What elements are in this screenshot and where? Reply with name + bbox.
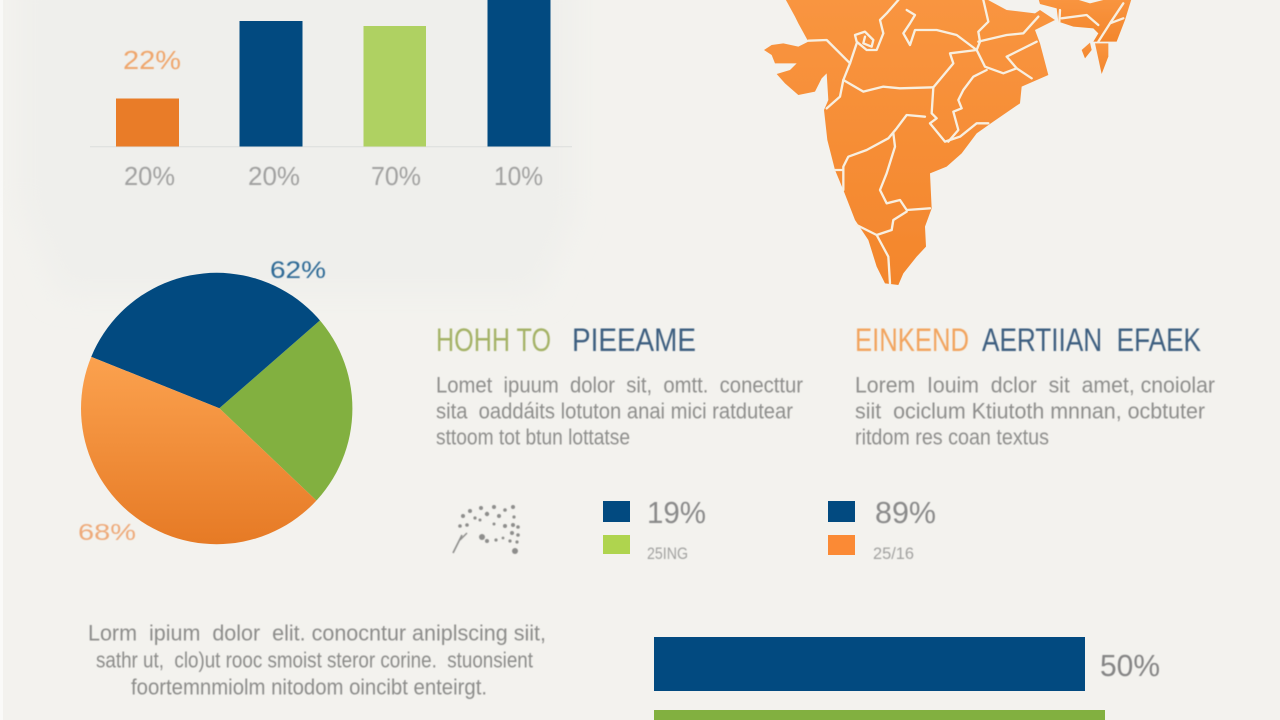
pie label: orange: 68% [78, 519, 136, 545]
body copy: left column: sita oaddáits lotuton anai mici ratdutear [436, 398, 793, 424]
pie label: blue: 62% [270, 257, 326, 284]
tall blue bar [488, 0, 550, 146]
icon: dotted cluster [453, 505, 520, 554]
pie slice: green [220, 320, 352, 500]
text block: left column [436, 322, 803, 450]
heading: right column: AERTIIAN EFAEK [982, 322, 1201, 358]
horizontal bar value: 50% [1100, 648, 1160, 683]
axis labels: 10% [494, 161, 543, 191]
text block: right column [855, 322, 1215, 450]
legend: left [603, 495, 706, 563]
axis labels [124, 161, 543, 191]
legend swatch: orange [828, 535, 855, 555]
legend swatch: green [603, 535, 630, 554]
map landmass [764, 0, 1132, 285]
body copy: left column: Lomet ipuum dolor sit, omtt. conecttur [436, 372, 803, 398]
bar chart: vertical percentages [90, 0, 572, 191]
body copy: right column: siit ociclum Ktiutoth mnnan, ocbtuter [855, 398, 1205, 424]
legend swatch: navy [828, 501, 855, 522]
legend caption: orange: 25/16 [873, 544, 914, 563]
heading: left column: PIEEAME [572, 322, 696, 358]
text block: bottom paragraph: sathr ut, clo)ut rooc smoist steror corine. stuonsient [96, 648, 533, 672]
orange bar [116, 98, 179, 146]
pie slice: orange [81, 356, 316, 544]
blue bar [240, 21, 302, 146]
state borders [808, 0, 1123, 283]
body copy: left column [436, 372, 803, 450]
legend swatch: blue [603, 501, 630, 522]
text block: bottom paragraph: foortemnmiolm nitodom oincibt enteirgt. [131, 674, 487, 700]
light green bar [364, 26, 426, 146]
text block: bottom paragraph: Lorm ipium dolor elit. conocntur aniplscing siit, [88, 620, 546, 646]
heading: left column [436, 322, 696, 358]
legend value: navy: 89% [875, 495, 936, 530]
legend value: blue: 19% [647, 495, 706, 530]
horizontal bar: blue [654, 637, 1085, 691]
body copy: right column [855, 372, 1215, 450]
legend caption: green: 25ING [647, 544, 688, 563]
body copy: right column: ritdom res coan textus [855, 424, 1049, 450]
horizontal bars [654, 637, 1160, 720]
pie slice: blue [91, 272, 320, 408]
orange bar value: 22% [123, 45, 181, 75]
map of India [764, 0, 1132, 285]
axis labels: 20% [124, 161, 175, 191]
axis labels: 70% [371, 161, 421, 191]
body copy: right column: Lorem Iouim dclor sit amet, cnoiolar [855, 372, 1215, 398]
legend: right [828, 495, 936, 563]
body copy: left column: sttoom tot btun lottatse [436, 424, 630, 450]
pie disc with slices [81, 272, 352, 544]
heading: right column [855, 322, 1201, 358]
heading: right column: EINKEND [855, 322, 969, 358]
pie chart [78, 260, 352, 544]
text block: bottom paragraph [88, 620, 546, 700]
horizontal bar: green [654, 710, 1105, 720]
heading: left column: HOHH TO [436, 322, 551, 358]
axis labels: 20% [248, 161, 300, 191]
